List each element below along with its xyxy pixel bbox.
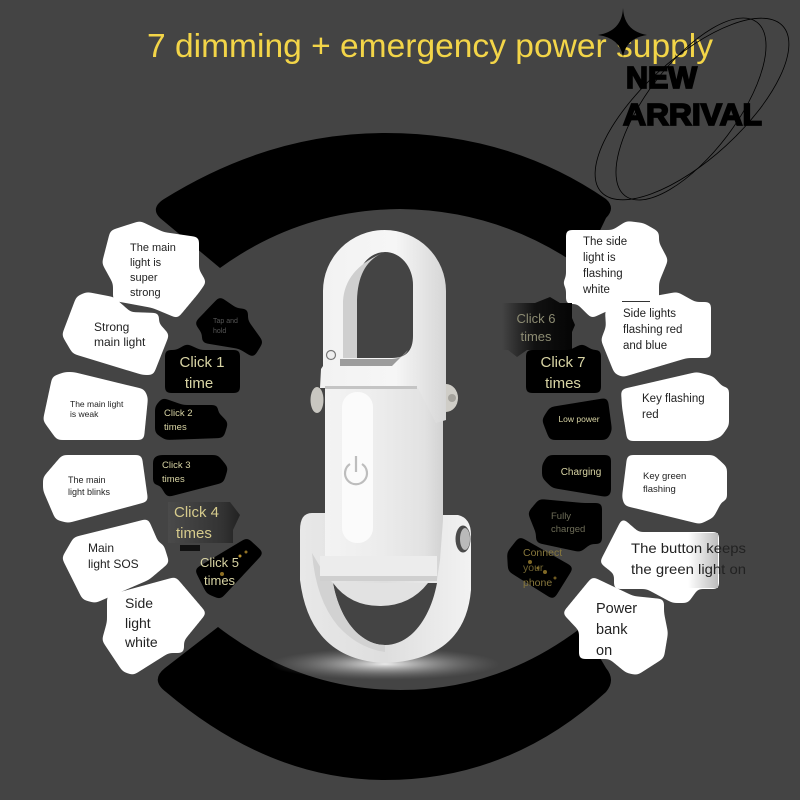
left label: tap and hold xyxy=(197,299,261,355)
left label: click 4 times: times xyxy=(176,525,212,542)
right card: key flashing red xyxy=(623,374,727,439)
left card: main light is weak: is weak xyxy=(70,409,99,419)
left label: tap and hold: Tap and xyxy=(213,318,238,325)
right label: click 6 times: times xyxy=(520,329,552,344)
badge: new arrival xyxy=(567,0,800,229)
right card: button keeps green light on xyxy=(602,521,746,601)
right card: key green flashing: flashing xyxy=(643,484,676,495)
right card: side light flashing white: light is xyxy=(583,252,616,264)
right card: side light flashing white: flashing xyxy=(583,268,623,280)
left card: main light SOS: Main xyxy=(88,541,114,555)
right card: side light flashing white xyxy=(565,223,666,316)
right card: power bank on: on xyxy=(596,643,612,659)
left card: side light white: white xyxy=(124,634,158,650)
badge: new arrival: ARRIVAL xyxy=(623,97,762,132)
right card: side light flashing white: The side xyxy=(583,236,627,248)
left card: side light white: Side xyxy=(125,595,153,611)
gate pin xyxy=(326,350,336,360)
left card: strong main light: Strong xyxy=(94,320,129,334)
right label: connect your phone: your xyxy=(523,562,544,574)
right label: click 7 times xyxy=(528,346,599,392)
collar shadow xyxy=(325,386,417,389)
right card: key flashing red: Key flashing xyxy=(642,393,705,405)
left card: main light blinks xyxy=(45,457,146,521)
hook xyxy=(320,230,446,423)
left label: click 5 times: times xyxy=(204,573,236,588)
right card: side lights flashing red and blue: Side lights xyxy=(623,308,676,320)
left card: main light blinks: light blinks xyxy=(68,487,111,497)
top black arc band xyxy=(156,133,611,268)
right label: click 6 times xyxy=(502,297,575,357)
right label: fully charged xyxy=(530,501,600,550)
left label: click 1 time: time xyxy=(185,375,213,392)
left card: main light super strong: The main xyxy=(130,242,176,254)
left label: tap and hold: hold xyxy=(213,328,226,335)
carabiner flashlight xyxy=(300,230,471,663)
right label: connect your phone: phone xyxy=(523,577,552,589)
left card: main light SOS xyxy=(64,521,167,601)
left label: click 4 times: Click 4 xyxy=(174,504,219,521)
right card: key green flashing: Key green xyxy=(643,471,686,482)
right label: click 7 times: times xyxy=(545,375,581,392)
left card: side light white: light xyxy=(125,615,151,631)
left card: main light super strong xyxy=(104,223,204,316)
right label: charging: Charging xyxy=(561,467,601,478)
right card: key flashing red: red xyxy=(642,409,659,421)
side screws xyxy=(310,384,458,413)
left card: main light blinks: The main xyxy=(68,475,106,485)
left card: main light is weak: The main light xyxy=(70,399,124,409)
left card: main light is weak xyxy=(45,374,146,438)
left label: click 1 time xyxy=(167,346,238,392)
left label: click 5 times: Click 5 xyxy=(200,555,239,570)
right card: side lights flashing red and blue: flashing red xyxy=(623,324,682,336)
right label: charging xyxy=(544,457,609,495)
right label: connect your phone: Connect xyxy=(523,547,562,559)
right label: fully charged: charged xyxy=(551,524,585,535)
right card: key green flashing xyxy=(624,457,725,522)
floor glow xyxy=(270,648,500,680)
right label: click 7 times: Click 7 xyxy=(540,354,586,371)
hook inner strap xyxy=(343,252,385,358)
right label: fully charged: Fully xyxy=(551,511,571,522)
right card: side lights flashing red and blue xyxy=(603,294,709,375)
left card: main light super strong: light is xyxy=(130,257,162,269)
right label: low power: Low power xyxy=(558,414,600,424)
left label: click 3 times: Click 3 xyxy=(162,460,191,471)
right card: button keeps green light on: the green light on xyxy=(631,561,746,577)
left label: click 4 times xyxy=(168,502,240,551)
left card: main light super strong: super xyxy=(130,272,158,284)
left label: click 5 times xyxy=(197,540,261,597)
left card: strong main light: main light xyxy=(94,335,146,349)
bottom black arc band xyxy=(158,627,611,780)
left label: click 2 times: times xyxy=(164,422,187,433)
right card: side light flashing white: white xyxy=(582,284,610,296)
title: 7 dimming + emergency power supply xyxy=(147,27,714,64)
light strip xyxy=(342,392,373,543)
left card: main light SOS: light SOS xyxy=(88,557,139,571)
left label: click 3 times xyxy=(155,457,226,495)
flashlight body xyxy=(320,388,443,580)
right card: power bank on: bank xyxy=(596,622,628,638)
left label: click 2 times xyxy=(157,400,226,438)
left card: main light super strong: strong xyxy=(130,287,161,299)
right card: power bank on xyxy=(565,579,666,673)
right label: low power xyxy=(544,400,610,438)
swivel ring xyxy=(300,513,471,663)
icon: power button xyxy=(345,456,367,484)
right card: button keeps green light on: The button keeps xyxy=(631,540,746,556)
right card: side lights flashing red and blue: and blue xyxy=(623,340,667,352)
left label: click 2 times: Click 2 xyxy=(164,408,193,419)
left card: strong main light xyxy=(64,294,167,373)
left card: side light white xyxy=(104,579,204,673)
right label: connect your phone xyxy=(509,539,571,597)
right label: click 6 times: Click 6 xyxy=(516,311,556,326)
lens dome xyxy=(333,583,428,606)
badge: new arrival: NEW xyxy=(626,60,698,95)
right card: power bank on: Power xyxy=(596,601,637,617)
left label: click 1 time: Click 1 xyxy=(179,354,225,371)
left label: click 3 times: times xyxy=(162,474,185,485)
